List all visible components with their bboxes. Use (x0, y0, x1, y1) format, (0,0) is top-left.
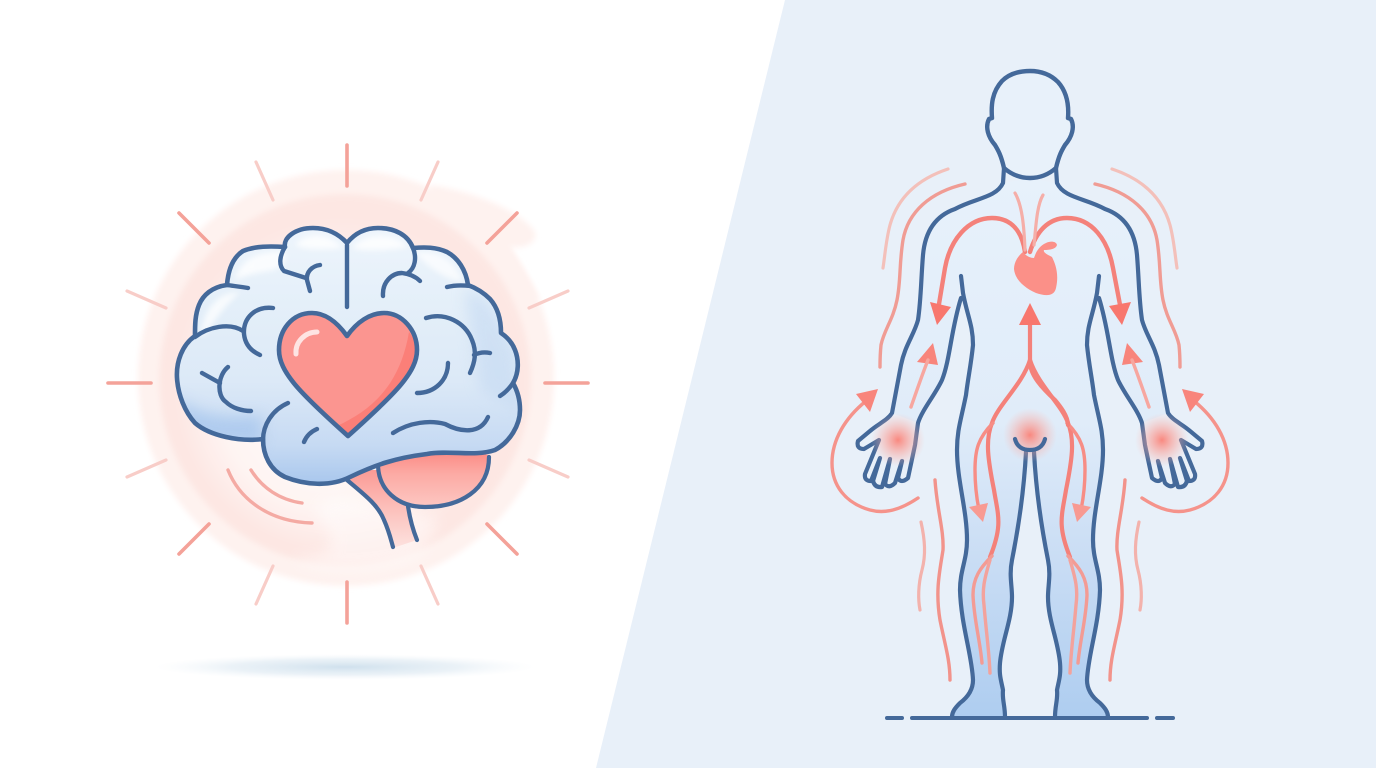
brain shading (175, 236, 520, 445)
brain folds (195, 245, 513, 442)
body glow (970, 350, 1090, 470)
brain stem (347, 470, 420, 548)
brain illustration group (108, 145, 588, 680)
cerebellum (378, 451, 489, 507)
halo circle (138, 170, 554, 586)
human body figure (832, 71, 1228, 718)
right half of body (1030, 168, 1228, 717)
pelvis arc (1015, 439, 1045, 450)
ground line (887, 716, 1173, 720)
circulation arches (938, 193, 1121, 425)
heart organ (1014, 242, 1057, 295)
brain outline (177, 228, 520, 484)
glow spots (871, 408, 1189, 467)
heart (279, 313, 417, 436)
background panel: right diagonal blue (596, 0, 1376, 768)
head (987, 71, 1073, 178)
motion arcs (228, 470, 312, 523)
left half of body (832, 168, 1030, 717)
ground shadow (155, 654, 535, 680)
radiating ticks (108, 145, 588, 623)
arrowheads (930, 302, 1131, 325)
